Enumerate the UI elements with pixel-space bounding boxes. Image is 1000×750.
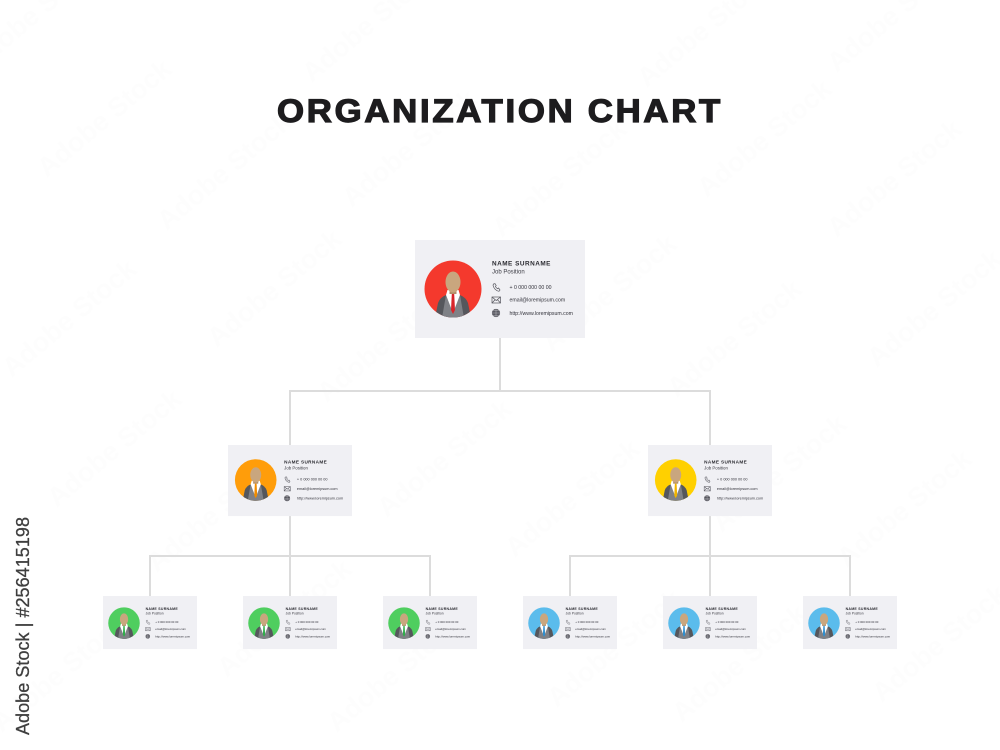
avatar: orange bbox=[235, 459, 277, 501]
avatar: green bbox=[388, 607, 420, 639]
contact details bbox=[295, 620, 331, 638]
contact details: + 0 000 000 00 00 bbox=[717, 478, 748, 482]
contact details: http://www.loremipsum.com bbox=[295, 634, 331, 638]
contact icons bbox=[286, 620, 290, 639]
contact details: http://www.loremipsum.com bbox=[297, 497, 343, 501]
name and position: Job Position bbox=[704, 465, 728, 470]
contact details: + 0 000 000 00 00 bbox=[435, 620, 459, 624]
contact details: email@loremipsum.com bbox=[575, 627, 607, 631]
watermark pattern: Adobe Stock bbox=[0, 253, 143, 383]
avatar: green bbox=[108, 607, 140, 639]
contact details bbox=[155, 620, 191, 638]
name and position bbox=[146, 607, 178, 616]
contact details: email@loremipsum.com bbox=[715, 627, 747, 631]
contact icons bbox=[146, 620, 150, 639]
avatar: yellow bbox=[655, 459, 697, 501]
contact details: + 0 000 000 00 00 bbox=[295, 620, 319, 624]
watermark pattern: Adobe Stock bbox=[706, 408, 853, 538]
name and position: NAME SURNAME bbox=[426, 607, 458, 611]
contact details: + 0 000 000 00 00 bbox=[510, 285, 552, 291]
connector lines bbox=[150, 338, 850, 596]
watermark pattern: Adobe Stock bbox=[311, 278, 458, 408]
watermark pattern: Adobe Stock bbox=[31, 53, 178, 183]
name and position bbox=[846, 607, 878, 616]
watermark pattern: Adobe Stock bbox=[821, 113, 968, 243]
card: staff 2 bbox=[243, 596, 337, 649]
contact details bbox=[297, 478, 343, 501]
name and position: Job Position bbox=[426, 612, 444, 616]
contact details bbox=[435, 620, 471, 638]
name and position: NAME SURNAME bbox=[566, 607, 598, 611]
contact icons bbox=[704, 477, 710, 501]
name and position bbox=[566, 607, 598, 616]
name and position: NAME SURNAME bbox=[706, 607, 738, 611]
watermark pattern: Adobe Stock bbox=[499, 433, 646, 563]
contact icons bbox=[566, 620, 570, 639]
contact details: email@loremipsum.com bbox=[510, 298, 565, 304]
name and position: NAME SURNAME bbox=[704, 460, 747, 465]
watermark pattern: Adobe Stock bbox=[661, 273, 808, 403]
contact details: + 0 000 000 00 00 bbox=[855, 620, 879, 624]
name and position bbox=[706, 607, 738, 616]
contact details: + 0 000 000 00 00 bbox=[297, 478, 328, 482]
card: left manager bbox=[228, 445, 352, 516]
name and position: NAME SURNAME bbox=[492, 260, 551, 268]
contact details bbox=[855, 620, 891, 638]
watermark pattern: Adobe Stock bbox=[41, 383, 188, 513]
watermark pattern: Adobe Stock bbox=[666, 598, 813, 728]
contact details: http://www.loremipsum.com bbox=[155, 634, 191, 638]
watermark pattern: Adobe Stock bbox=[336, 83, 483, 213]
contact icons bbox=[706, 620, 710, 639]
name and position: Job Position bbox=[146, 612, 164, 616]
contact details: http://www.loremipsum.com bbox=[717, 497, 763, 501]
watermark pattern: Adobe Stock bbox=[541, 583, 688, 713]
stock credit: Adobe Stock | #256415198 bbox=[13, 517, 33, 735]
avatar: blue bbox=[808, 607, 840, 639]
contact details bbox=[715, 620, 751, 638]
watermark pattern: Adobe Stock bbox=[486, 113, 633, 243]
contact details: email@loremipsum.com bbox=[435, 627, 467, 631]
name and position bbox=[286, 607, 318, 616]
name and position: NAME SURNAME bbox=[846, 607, 878, 611]
contact details bbox=[575, 620, 611, 638]
card: staff 3 bbox=[383, 596, 477, 649]
contact icons bbox=[846, 620, 850, 639]
title: ORGANIZATION CHART bbox=[277, 93, 723, 129]
contact icons bbox=[284, 477, 290, 501]
avatar: red bbox=[424, 260, 482, 318]
name and position: NAME SURNAME bbox=[284, 460, 327, 465]
contact details bbox=[510, 285, 573, 317]
name and position: NAME SURNAME bbox=[146, 607, 178, 611]
name and position: Job Position bbox=[566, 612, 584, 616]
avatar: blue bbox=[528, 607, 560, 639]
contact details: http://www.loremipsum.com bbox=[575, 634, 611, 638]
watermark pattern: Adobe Stock bbox=[321, 608, 468, 738]
name and position: Job Position bbox=[846, 612, 864, 616]
watermark pattern: Adobe Stock bbox=[831, 443, 978, 573]
name and position: Job Position bbox=[492, 270, 525, 276]
card: right manager bbox=[648, 445, 772, 516]
contact details: email@loremipsum.com bbox=[295, 627, 327, 631]
card: staff 6 bbox=[803, 596, 897, 649]
name and position: NAME SURNAME bbox=[286, 607, 318, 611]
contact details: http://www.loremipsum.com bbox=[510, 311, 573, 317]
card: staff 4 bbox=[523, 596, 617, 649]
watermark pattern: Adobe Stock bbox=[536, 228, 683, 358]
watermark pattern: Adobe Stock bbox=[371, 393, 518, 523]
contact details: http://www.loremipsum.com bbox=[435, 634, 471, 638]
avatar: green bbox=[248, 607, 280, 639]
watermark pattern: Adobe Stock bbox=[691, 73, 838, 203]
contact details bbox=[717, 478, 763, 501]
contact icons bbox=[492, 284, 500, 317]
watermark pattern: Adobe Stock bbox=[211, 553, 358, 683]
contact icons bbox=[426, 620, 430, 639]
contact details: + 0 000 000 00 00 bbox=[575, 620, 599, 624]
name and position bbox=[426, 607, 458, 616]
name and position: Job Position bbox=[706, 612, 724, 616]
name and position: Job Position bbox=[286, 612, 304, 616]
name and position: Job Position bbox=[284, 465, 308, 470]
watermark pattern: Adobe Stock bbox=[141, 448, 288, 578]
card: staff 1 bbox=[103, 596, 197, 649]
watermark pattern: Adobe Stock bbox=[151, 106, 298, 236]
name and position bbox=[704, 460, 747, 470]
name and position bbox=[284, 460, 327, 470]
contact details: email@loremipsum.com bbox=[155, 627, 187, 631]
name and position bbox=[492, 260, 551, 276]
watermark pattern: Adobe Stock bbox=[201, 223, 348, 353]
avatar: blue bbox=[668, 607, 700, 639]
contact details: email@loremipsum.com bbox=[297, 487, 338, 491]
card: staff 5 bbox=[663, 596, 757, 649]
contact details: http://www.loremipsum.com bbox=[855, 634, 891, 638]
contact details: email@loremipsum.com bbox=[717, 487, 758, 491]
contact details: http://www.loremipsum.com bbox=[715, 634, 751, 638]
contact details: email@loremipsum.com bbox=[855, 627, 887, 631]
card: top executive bbox=[415, 240, 585, 338]
contact details: + 0 000 000 00 00 bbox=[715, 620, 739, 624]
contact details: + 0 000 000 00 00 bbox=[155, 620, 179, 624]
